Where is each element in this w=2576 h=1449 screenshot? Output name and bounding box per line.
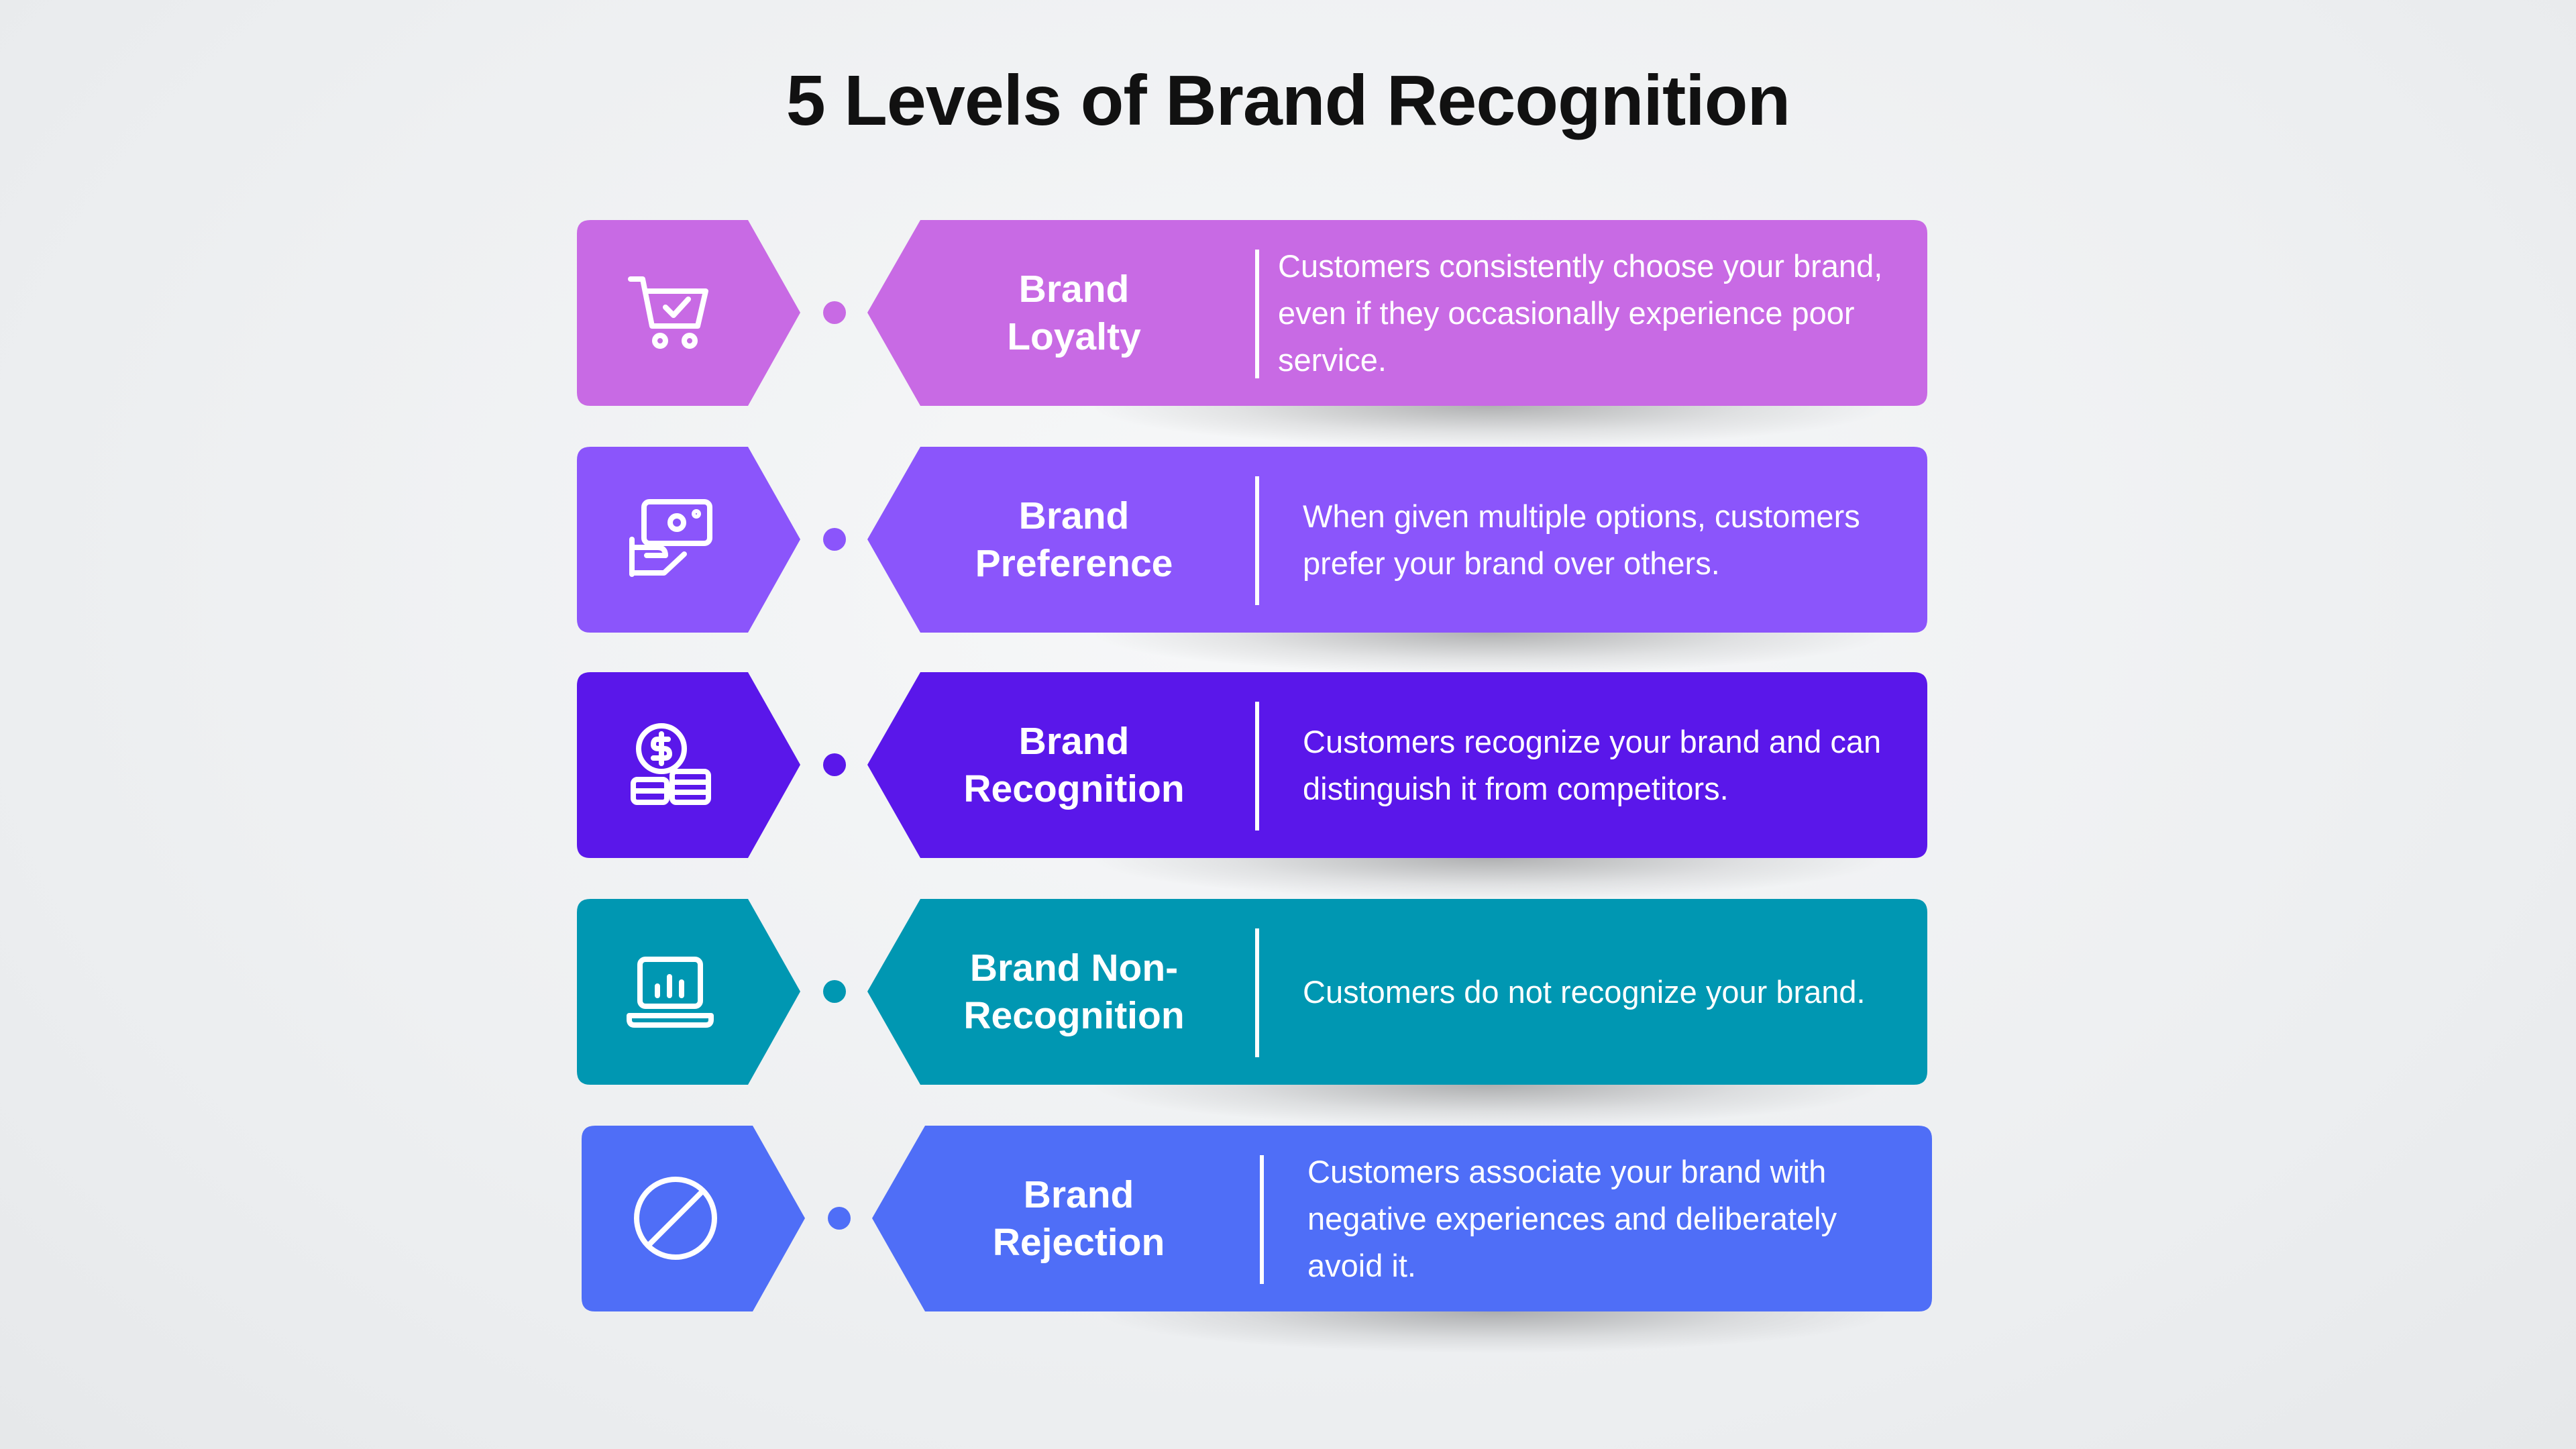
row: brand non-recognition xyxy=(577,899,1927,1120)
label xyxy=(993,1173,1165,1264)
label xyxy=(975,494,1173,585)
row: brand recognition xyxy=(577,672,1927,894)
row: brand loyalty xyxy=(577,220,1927,441)
label xyxy=(963,946,1185,1037)
description: Customers consistently choose your brand, even if they occasionally experience poor service. xyxy=(1278,248,1882,377)
label: Recognition xyxy=(963,994,1185,1037)
icon: cart xyxy=(628,276,708,349)
icon: coins xyxy=(631,723,711,805)
label: Brand xyxy=(1019,719,1129,762)
label: Brand xyxy=(1019,494,1129,537)
label: Preference xyxy=(975,542,1173,585)
icon: laptop chart xyxy=(627,957,714,1028)
label: Recognition xyxy=(963,767,1185,810)
description: Customers do not recognize your brand. xyxy=(1303,974,1866,1009)
icon: money in hand xyxy=(629,499,712,577)
label: Brand xyxy=(1019,267,1129,310)
label: Brand Non- xyxy=(970,946,1178,989)
label: Loyalty xyxy=(1007,315,1141,358)
row: brand preference xyxy=(577,447,1927,668)
description: Customers associate your brand with negative experiences and deliberately avoid it. xyxy=(1307,1154,1837,1283)
row: brand rejection xyxy=(582,1126,1932,1347)
label xyxy=(1007,267,1141,358)
description: Customers recognize your brand and can distinguish it from competitors. xyxy=(1303,723,1881,806)
label xyxy=(963,719,1185,810)
label: Rejection xyxy=(993,1221,1165,1264)
description: When given multiple options, customers prefer your brand over others. xyxy=(1303,498,1860,581)
title: 5 Levels of Brand Recognition xyxy=(786,61,1790,140)
label: Brand xyxy=(1024,1173,1134,1216)
icon: prohibited xyxy=(634,1177,717,1260)
